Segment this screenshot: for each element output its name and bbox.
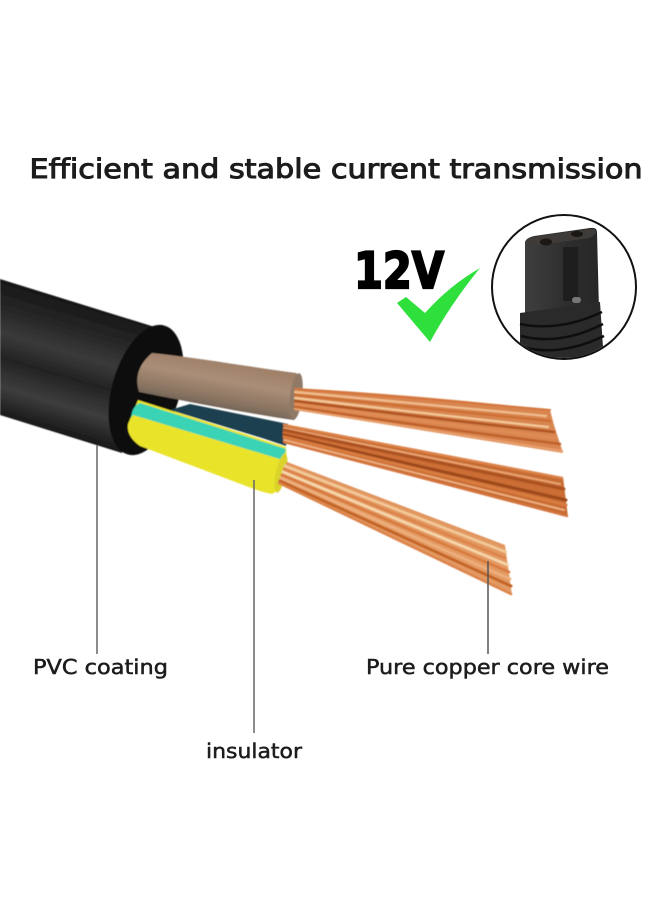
ribbed base xyxy=(520,302,604,362)
blue inner wire xyxy=(170,404,288,446)
pin holes xyxy=(540,238,552,246)
leader line: PVC coating xyxy=(96,445,98,654)
icon: connector in circle xyxy=(492,215,636,362)
icon: green check mark xyxy=(397,268,480,342)
leader line: insulator xyxy=(253,480,255,733)
title: Efficient and stable current transmission xyxy=(30,154,642,185)
12V label: 12V xyxy=(354,242,444,300)
connector body xyxy=(525,228,599,318)
yellow-green insulated wire xyxy=(128,400,290,494)
outer PVC jacket xyxy=(0,279,197,464)
center slot xyxy=(563,247,578,301)
copper strands: middle bundle xyxy=(284,424,568,517)
leader line: copper core xyxy=(487,561,489,654)
copper strands: top bundle xyxy=(295,388,563,453)
label: insulator: insulator xyxy=(206,739,303,763)
brown insulated wire xyxy=(137,353,305,420)
copper strands: bottom bundle xyxy=(278,462,512,595)
cable illustration xyxy=(0,279,568,595)
label: PVC coating: PVC coating xyxy=(33,655,168,679)
label: Pure copper core wire: Pure copper core wire xyxy=(366,655,609,679)
